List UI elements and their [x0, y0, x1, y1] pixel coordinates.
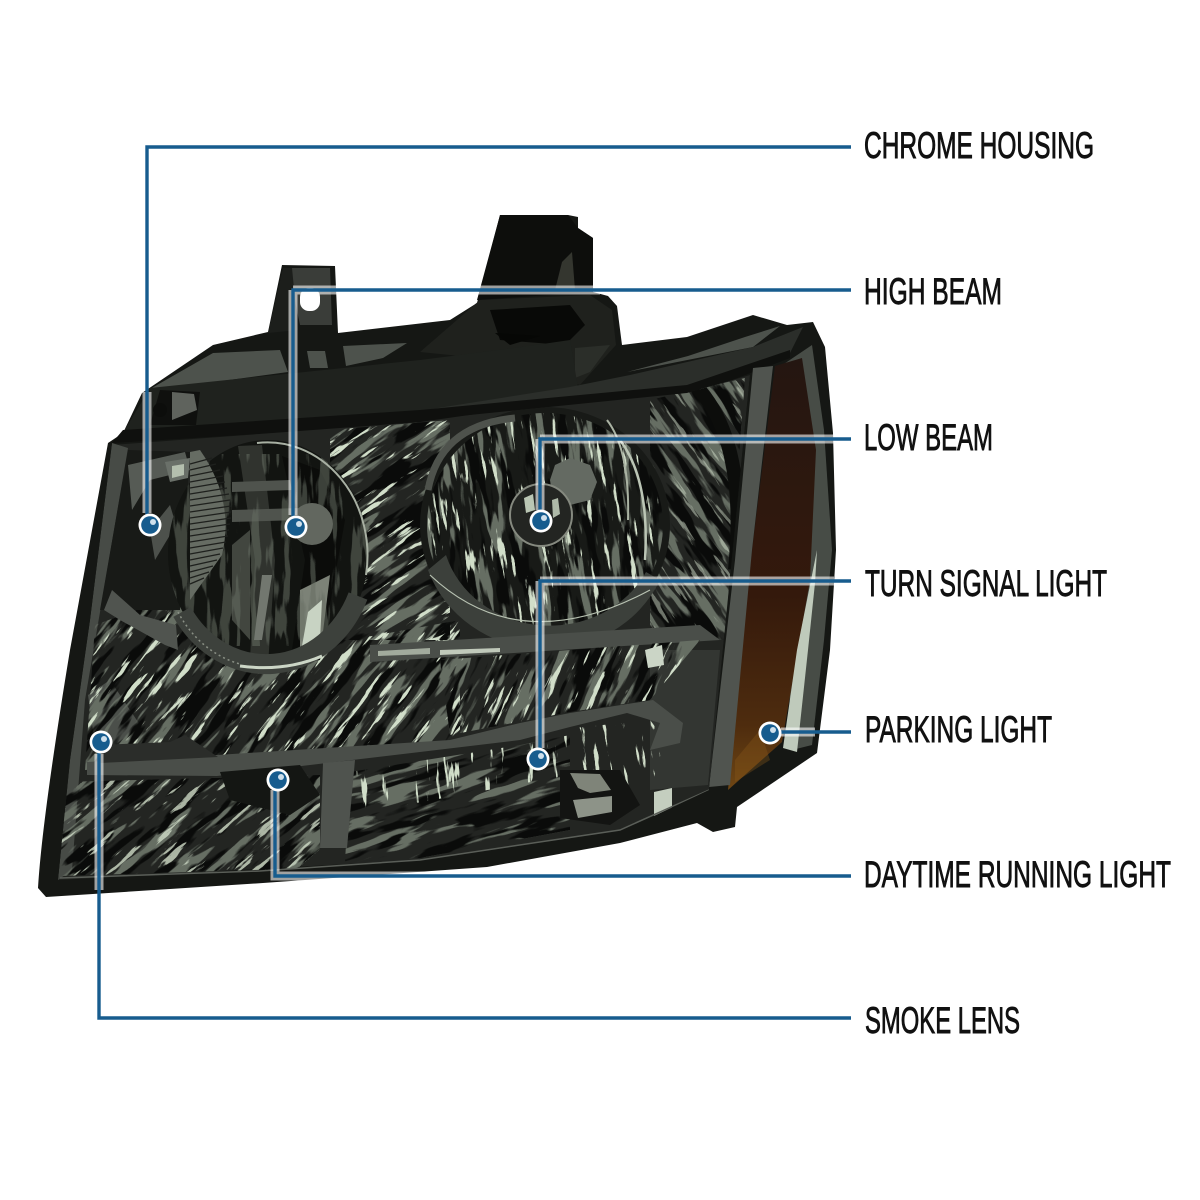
leader: chrome housing — [147, 147, 851, 515]
marker: parking light — [758, 722, 782, 744]
leader: parking light — [775, 730, 851, 734]
mounting tab with hole — [268, 268, 332, 333]
lens base — [58, 375, 750, 880]
label: smoke lens: SMOKE LENS — [865, 1000, 1020, 1041]
bottom lens rim — [60, 790, 709, 878]
horizontal strip under beams — [370, 625, 720, 662]
leader: turn signal light — [540, 581, 851, 748]
low beam ring — [420, 388, 740, 638]
texture: right of low beam — [650, 378, 745, 640]
marker: high beam — [284, 516, 308, 538]
upper housing mount — [420, 215, 616, 385]
texture: lower optics bright spikes — [356, 736, 567, 808]
left bezel strip — [58, 443, 128, 880]
headlight assembly — [38, 215, 836, 897]
vertical stem — [320, 760, 355, 848]
lower reflector tone — [88, 650, 720, 790]
leader: low beam — [540, 439, 851, 510]
dark brow band — [112, 327, 803, 443]
callout lines — [99, 147, 851, 1018]
leader: daytime running light — [275, 790, 851, 876]
texture: between beams — [330, 420, 450, 640]
marker: turn signal light — [526, 748, 550, 770]
gray lens divider strip — [709, 366, 773, 787]
label: parking light: PARKING LIGHT — [865, 709, 1052, 750]
texture: lower optics gray — [345, 737, 570, 861]
housing silhouette — [38, 215, 836, 897]
infographic: headlight feature diagram — [38, 132, 1171, 1034]
label: low beam: LOW BEAM — [864, 417, 993, 458]
marker: daytime running light — [266, 768, 290, 792]
amber side marker — [728, 345, 832, 790]
lower bright blocks — [560, 645, 672, 825]
leader: high beam — [293, 290, 851, 517]
leader: smoke lens — [99, 752, 851, 1018]
upper gray wedge — [143, 326, 780, 393]
high beam ring — [168, 440, 390, 668]
horizontal light bar — [87, 700, 683, 815]
marker: chrome housing — [138, 514, 162, 536]
marker: smoke lens — [90, 730, 112, 754]
texture: lower left optics — [61, 775, 320, 876]
left compartment reflections — [100, 450, 190, 650]
lens interior — [58, 375, 750, 880]
texture: lower far reflectors — [440, 640, 700, 735]
texture: lower left diagonal reflectors — [85, 607, 460, 770]
label: high beam: HIGH BEAM — [864, 271, 1002, 312]
striped reflector — [190, 450, 231, 600]
halo under leader lines — [99, 290, 836, 890]
marker: low beam — [530, 510, 552, 532]
texture: turn signal reflector — [580, 720, 660, 785]
